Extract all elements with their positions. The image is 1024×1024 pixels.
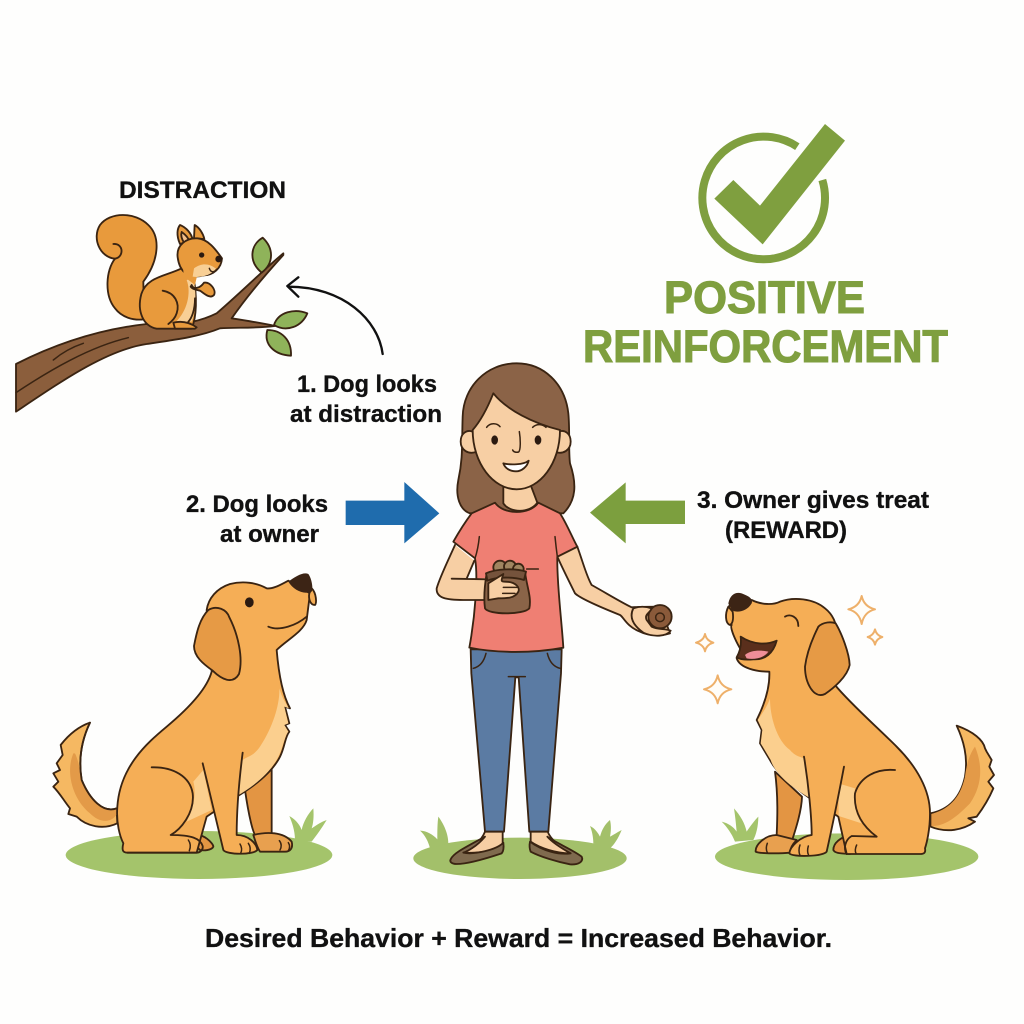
illustration: squirrel on branch — [16, 215, 307, 412]
ear — [805, 622, 850, 695]
eye — [785, 615, 798, 626]
label: step 3: 3. Owner gives treat — [697, 487, 929, 514]
label: step 1: 1. Dog looks — [297, 371, 437, 398]
label: step 2: at owner — [220, 521, 319, 548]
illustration: owner with treats — [413, 363, 672, 879]
body and head — [728, 599, 930, 854]
heading: distraction: DISTRACTION — [119, 177, 286, 204]
arrow: curved arrow to distraction — [287, 277, 383, 354]
label: step 1 — [290, 371, 442, 428]
label: step 1: at distraction — [290, 401, 442, 428]
ground — [66, 831, 332, 879]
body and head — [117, 581, 310, 853]
hair — [457, 363, 574, 513]
facial features — [491, 435, 498, 445]
title: positive reinforcement: REINFORCEMENT — [583, 321, 948, 372]
branch — [16, 253, 283, 412]
grass — [722, 808, 758, 842]
arrow: blue arrow to owner — [346, 482, 439, 543]
illustration: happy dog receiving treat — [696, 593, 994, 880]
face — [473, 393, 560, 489]
tail — [53, 723, 117, 827]
far legs — [245, 768, 272, 837]
leaves — [252, 238, 307, 356]
treat in hand — [648, 605, 672, 628]
trousers and shoes — [450, 649, 582, 864]
front leg — [203, 753, 257, 854]
label: step 2: 2. Dog looks — [186, 491, 328, 518]
ground — [715, 833, 978, 880]
chest fur — [237, 688, 289, 796]
neck — [503, 483, 537, 511]
ground — [413, 817, 627, 879]
tail — [931, 726, 994, 830]
label: step 2 — [186, 491, 328, 548]
shirt — [453, 503, 577, 652]
icon: green check in circle — [702, 124, 845, 259]
title: positive reinforcement — [583, 272, 948, 372]
muzzle and nose — [726, 607, 733, 625]
title: positive reinforcement: POSITIVE — [664, 272, 865, 323]
front leg — [789, 757, 844, 856]
treat bag — [484, 572, 530, 613]
squirrel — [97, 215, 222, 329]
grass — [289, 808, 327, 842]
far legs — [775, 772, 802, 847]
mouth and tongue — [737, 637, 777, 660]
ear — [194, 608, 241, 680]
label: step 3 — [697, 487, 929, 544]
label: step 3: (REWARD) — [725, 517, 847, 544]
right arm — [557, 547, 670, 635]
arrow: green arrow to owner — [590, 482, 685, 543]
chest fur — [758, 698, 810, 798]
hip and paw — [845, 770, 895, 854]
left arm over shirt — [437, 545, 503, 600]
hand on bag — [488, 574, 519, 600]
sparkles — [696, 596, 882, 703]
caption: behavior equation: Desired Behavior + Reward = Increased Behavior. — [205, 923, 832, 953]
illustration: dog looking up at owner — [53, 573, 332, 879]
hip and paw — [127, 767, 203, 853]
ears — [461, 431, 477, 453]
upper body — [437, 363, 672, 652]
muzzle, nose, eye, mouth — [309, 588, 316, 605]
